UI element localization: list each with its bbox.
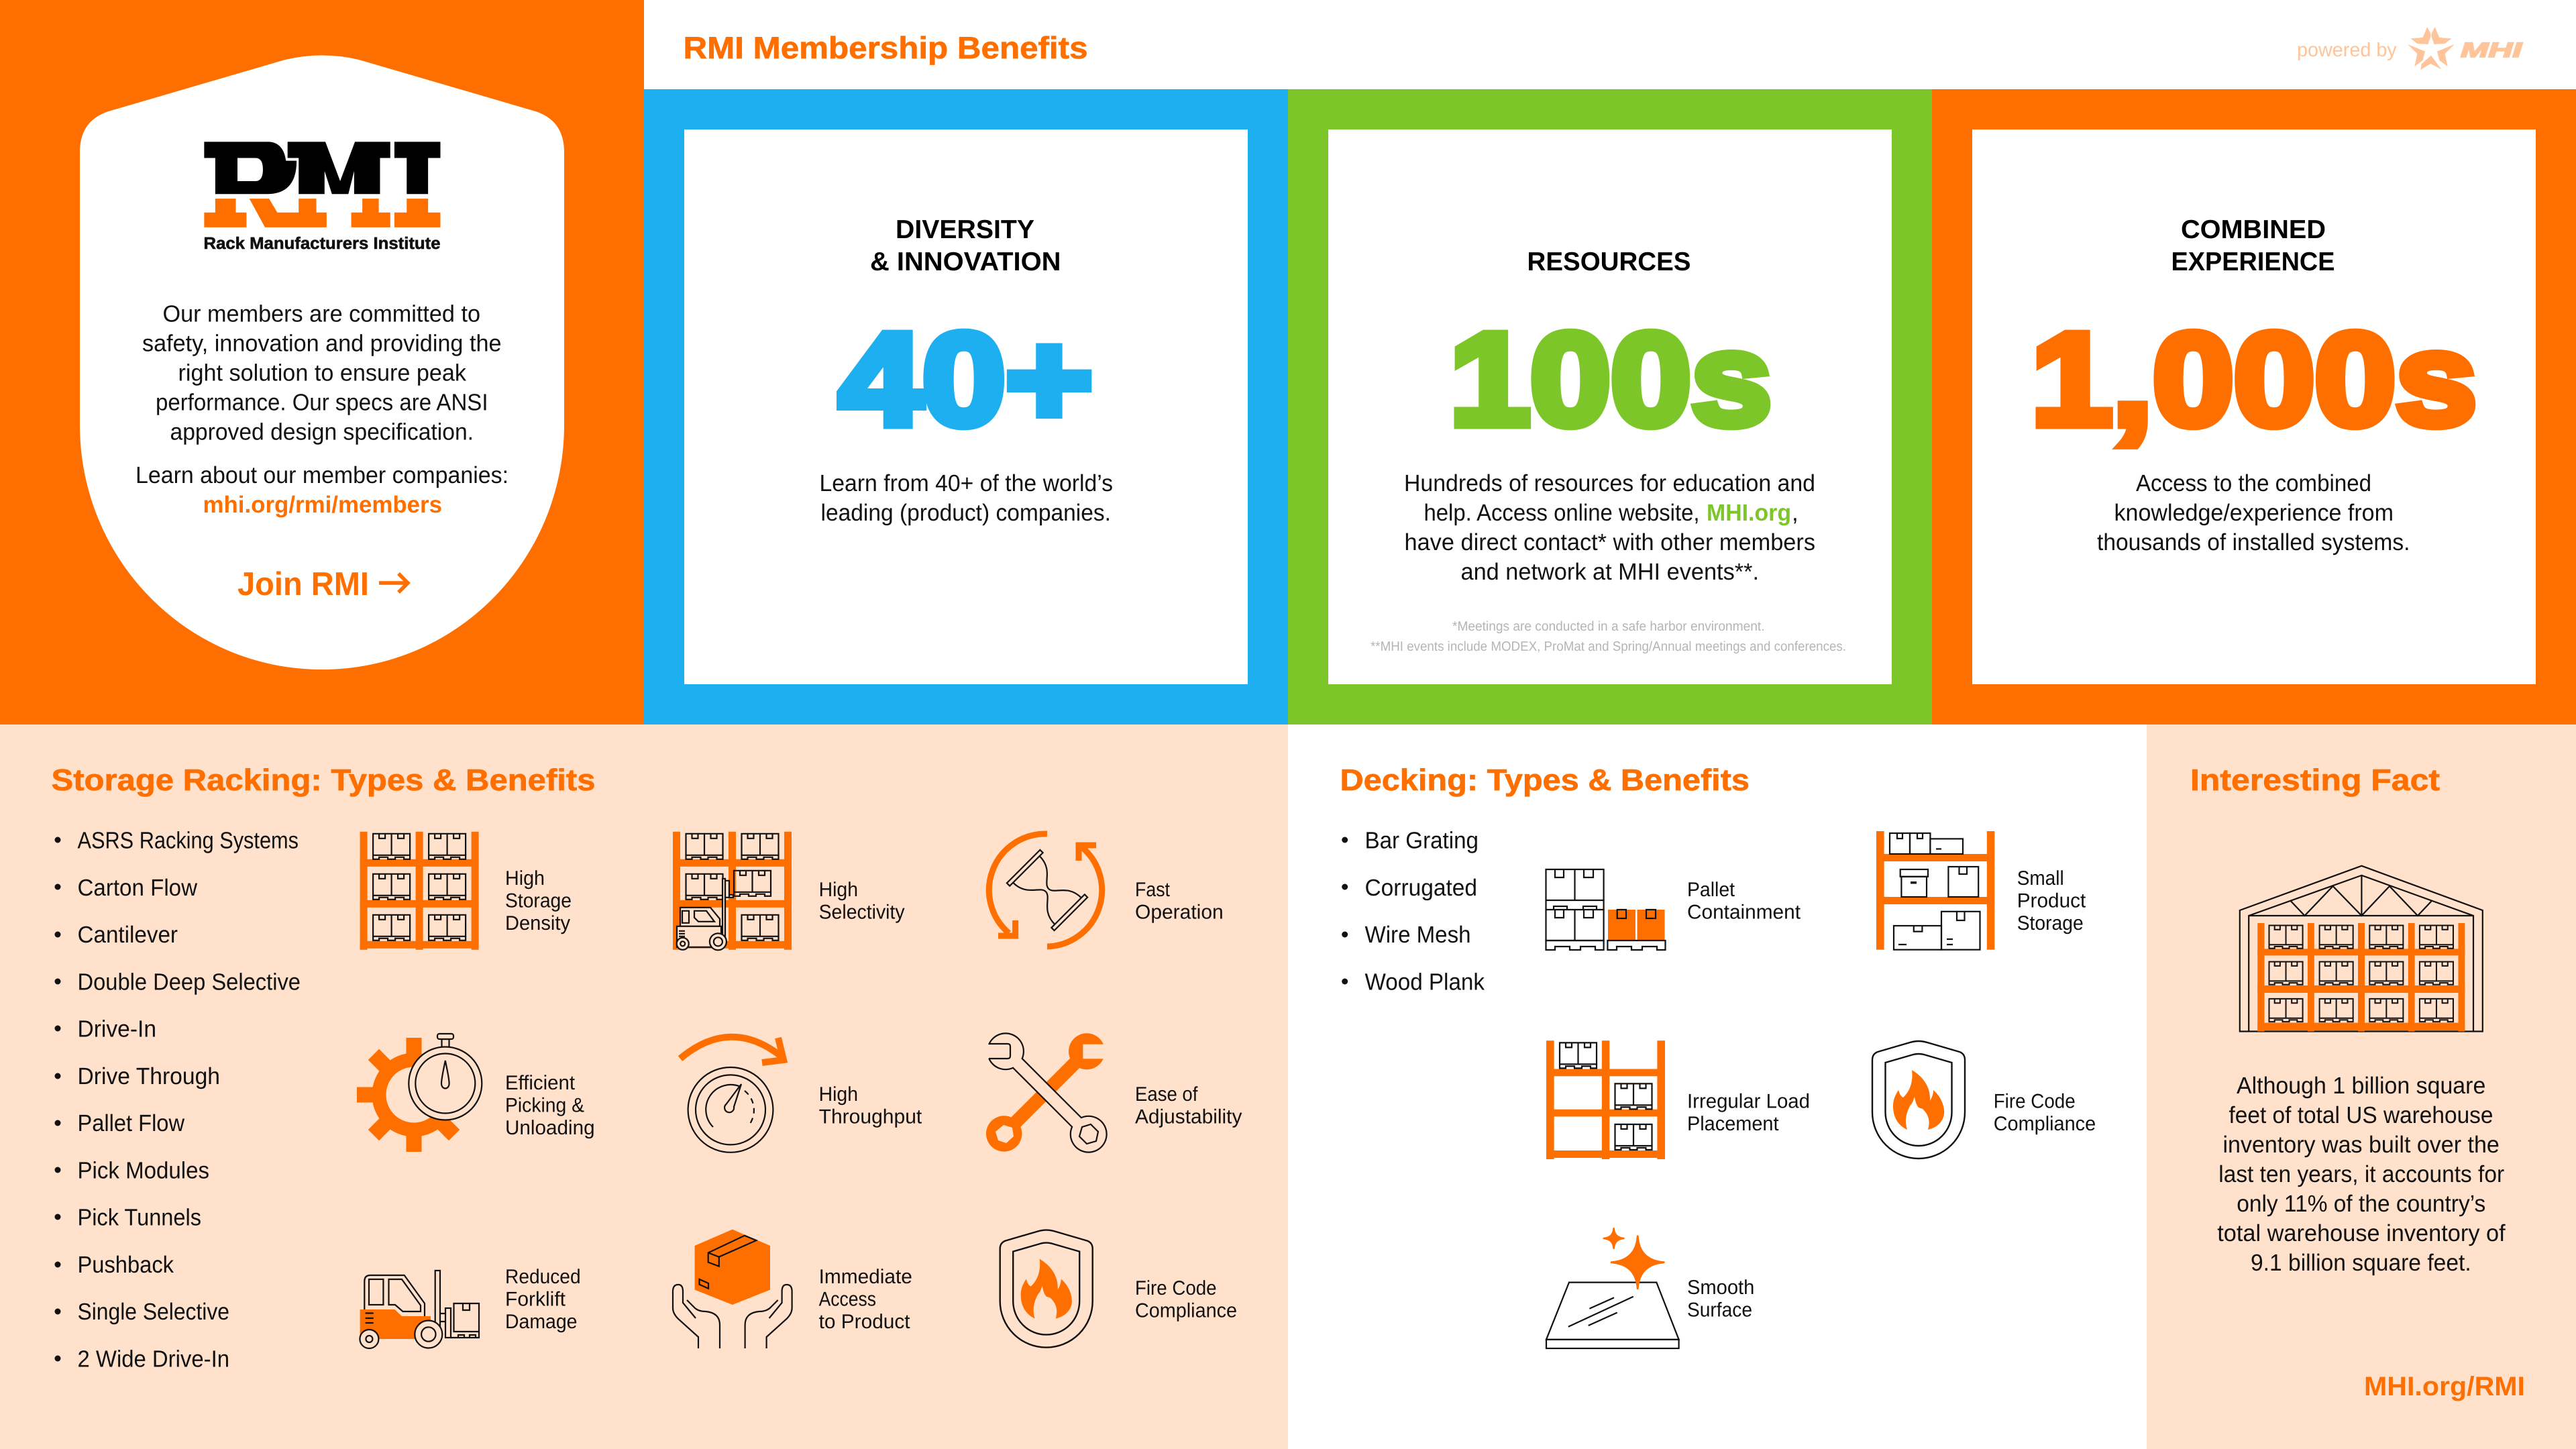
statistic: 1,000s: 1,000s	[2031, 306, 2477, 453]
label: pallet containment: Pallet	[1687, 879, 1735, 901]
label: high storage density: High	[505, 867, 545, 890]
label: reduced forklift damage: Reduced	[505, 1266, 581, 1288]
intro text: performance. Our specs are ANSI	[156, 389, 488, 416]
panel: diversity and innovation	[644, 89, 1288, 724]
list: racking types	[55, 828, 301, 1373]
list: decking types: Wire Mesh	[1364, 922, 1470, 948]
card body: leading (product) companies.	[821, 500, 1111, 526]
label: immediate access to product: Immediate	[819, 1266, 912, 1288]
label: fire code compliance	[1994, 1091, 2096, 1135]
label: fire code compliance: Compliance	[1994, 1113, 2096, 1135]
heading: storage racking: Storage Racking: Types & Benefits	[51, 763, 596, 797]
list: racking types: ASRS Racking Systems	[78, 828, 299, 853]
card body: help. Access online website,	[1424, 500, 1700, 526]
card body	[1404, 470, 1815, 585]
label: fast operation: Fast	[1135, 879, 1171, 901]
heading: decking: Decking: Types & Benefits	[1340, 763, 1750, 797]
label: reduced forklift damage: Forklift	[505, 1288, 566, 1311]
card heading: DIVERSITY	[896, 215, 1034, 244]
label: high storage density	[505, 867, 572, 934]
icon: fire shield	[1000, 1230, 1093, 1348]
icon: irregular load rack	[1546, 1040, 1665, 1159]
link: MHI.org/RMI: MHI.org/RMI	[2364, 1372, 2525, 1401]
text: interesting fact body: Although 1 billion square	[2237, 1073, 2485, 1099]
list: racking types: Single Selective	[78, 1299, 229, 1325]
list: racking types: Pushback	[78, 1252, 174, 1278]
icon: forklift	[360, 1271, 479, 1348]
card body	[820, 470, 1113, 526]
card heading	[870, 215, 1061, 276]
list: racking types: Carton Flow	[78, 875, 198, 901]
label: fast operation	[1135, 879, 1224, 923]
label: reduced forklift damage	[505, 1266, 581, 1333]
label: high throughput: High	[819, 1083, 858, 1106]
card heading: & INNOVATION	[870, 248, 1061, 276]
card body: thousands of installed systems.	[2097, 529, 2410, 555]
card body: MHI.org	[1707, 500, 1791, 526]
card body: ,	[1792, 500, 1799, 526]
list: racking types: Drive-In	[78, 1016, 156, 1042]
text: interesting fact body: only 11% of the country’s	[2237, 1191, 2485, 1217]
label: high throughput: Throughput	[819, 1106, 922, 1128]
icon: speedometer with arrow	[680, 1037, 784, 1152]
icon: box held in hands	[673, 1230, 792, 1348]
label: pallet containment	[1687, 879, 1801, 923]
icon: warehouse	[2240, 866, 2483, 1032]
icon: high selectivity rack with forklift	[673, 832, 792, 950]
label: efficient picking and unloading	[505, 1072, 595, 1139]
statistic: 100s: 100s	[1450, 306, 1772, 453]
label: small product storage	[2017, 867, 2086, 934]
footnotes	[1371, 619, 1846, 654]
label: high selectivity	[819, 879, 905, 923]
shield shape	[80, 55, 564, 669]
list: racking types: Pick Modules	[78, 1157, 209, 1183]
label: efficient picking and unloading: Efficient	[505, 1072, 576, 1094]
logo: powered by MHI	[2297, 27, 2523, 70]
intro text: Our members are committed to	[162, 301, 480, 327]
heading: interesting fact: Interesting Fact	[2190, 763, 2440, 797]
label: reduced forklift damage: Damage	[505, 1311, 577, 1333]
list: decking types: Bar Grating	[1364, 828, 1479, 853]
list: decking types	[1342, 828, 1485, 995]
label: irregular load placement: Placement	[1687, 1113, 1779, 1135]
footnotes: **MHI events include MODEX, ProMat and Spring/Annual meetings and conferences.	[1371, 639, 1846, 654]
logo caption: Rack Manufacturers Institute	[204, 234, 441, 253]
label: high selectivity: High	[819, 879, 858, 901]
label: pallet containment: Containment	[1687, 902, 1801, 923]
logo: powered by MHI: MHI	[2461, 38, 2523, 62]
list: racking types: 2 Wide Drive-In	[78, 1346, 229, 1373]
text: interesting fact body	[2217, 1073, 2506, 1276]
label: fire code compliance: Fire Code	[1135, 1277, 1217, 1299]
link: member companies: mhi.org/rmi/members	[203, 492, 442, 518]
label: high storage density: Density	[505, 912, 570, 934]
card heading: COMBINED	[2181, 215, 2326, 244]
label: fire code compliance: Fire Code	[1994, 1091, 2076, 1112]
intro text: right solution to ensure peak	[178, 360, 466, 386]
label: ease of adjustability	[1135, 1083, 1242, 1128]
list: racking types: Pallet Flow	[78, 1110, 185, 1136]
label: immediate access to product: to Product	[819, 1311, 910, 1333]
list: racking types: Pick Tunnels	[78, 1205, 201, 1231]
text: interesting fact body: inventory was built over the	[2223, 1132, 2500, 1158]
card body: Hundreds of resources for education and	[1404, 470, 1815, 496]
footnotes: *Meetings are conducted in a safe harbor environment.	[1452, 619, 1764, 634]
label: high selectivity: Selectivity	[819, 902, 905, 923]
icon: hourglass with rotating arrows	[989, 834, 1102, 947]
label: fire code compliance	[1135, 1277, 1237, 1322]
list: decking types: Wood Plank	[1364, 969, 1485, 995]
statistic: 40+: 40+	[839, 306, 1093, 453]
icon: crossed wrenches	[985, 1032, 1108, 1153]
label: ease of adjustability: Ease of	[1135, 1083, 1198, 1106]
label: fast operation: Operation	[1135, 902, 1224, 923]
intro text	[136, 301, 508, 488]
label: smooth surface: Surface	[1687, 1299, 1752, 1322]
label: irregular load placement: Irregular Load	[1687, 1091, 1810, 1112]
list: racking types: Double Deep Selective	[78, 969, 301, 995]
card heading: EXPERIENCE	[2171, 248, 2334, 276]
icon: gear and stopwatch	[357, 1034, 482, 1152]
label: fire code compliance: Compliance	[1135, 1300, 1237, 1322]
intro text: Learn about our member companies:	[136, 462, 508, 488]
card body: knowledge/experience from	[2114, 500, 2394, 526]
text: interesting fact body: feet of total US warehouse	[2229, 1102, 2493, 1128]
call to action: Join RMI: Join RMI	[237, 566, 369, 602]
label: efficient picking and unloading: Picking &	[505, 1095, 584, 1116]
label: efficient picking and unloading: Unloading	[505, 1117, 595, 1139]
icon: high storage density rack	[360, 832, 479, 950]
label: immediate access to product	[819, 1266, 912, 1333]
card body: and network at MHI events**.	[1461, 559, 1759, 585]
label: ease of adjustability: Adjustability	[1135, 1106, 1242, 1128]
intro text: approved design specification.	[170, 419, 474, 445]
label: small product storage: Product	[2017, 890, 2086, 912]
icon: smooth surface	[1546, 1228, 1679, 1348]
list: decking types: Corrugated	[1364, 875, 1477, 901]
logo: RMI	[204, 142, 440, 227]
logo: powered by MHI: powered by	[2297, 40, 2397, 61]
label: smooth surface: Smooth	[1687, 1277, 1754, 1299]
icon: pallet containment	[1546, 869, 1665, 950]
card heading: RESOURCES	[1527, 248, 1690, 276]
label: smooth surface	[1687, 1277, 1754, 1322]
panel: combined experience	[1932, 89, 2576, 724]
label: high storage density: Storage	[505, 890, 572, 912]
card body	[2097, 470, 2410, 555]
text: interesting fact body: total warehouse inventory of	[2217, 1220, 2506, 1246]
icon: small product storage	[1876, 831, 1994, 950]
label: small product storage: Small	[2017, 867, 2064, 890]
icon: fire shield	[1872, 1041, 1965, 1159]
heading: RMI Membership Benefits: RMI Membership Benefits	[683, 30, 1088, 65]
list: racking types: Cantilever	[78, 922, 178, 948]
list: racking types: Drive Through	[78, 1063, 220, 1089]
label: irregular load placement	[1687, 1091, 1810, 1135]
label: high throughput	[819, 1083, 922, 1128]
panel: RMI shield intro	[80, 55, 564, 669]
panel: resources	[1288, 89, 1932, 724]
card body: Access to the combined	[2136, 470, 2371, 496]
card body: have direct contact* with other members	[1405, 529, 1815, 555]
label: small product storage: Storage	[2017, 912, 2084, 934]
text: interesting fact body: 9.1 billion square feet.	[2251, 1250, 2471, 1276]
intro text: safety, innovation and providing the	[142, 330, 502, 357]
card body: Learn from 40+ of the world’s	[820, 470, 1113, 496]
card heading	[2171, 215, 2334, 276]
text: interesting fact body: last ten years, it accounts for	[2218, 1161, 2504, 1187]
label: immediate access to product: Access	[819, 1288, 876, 1311]
